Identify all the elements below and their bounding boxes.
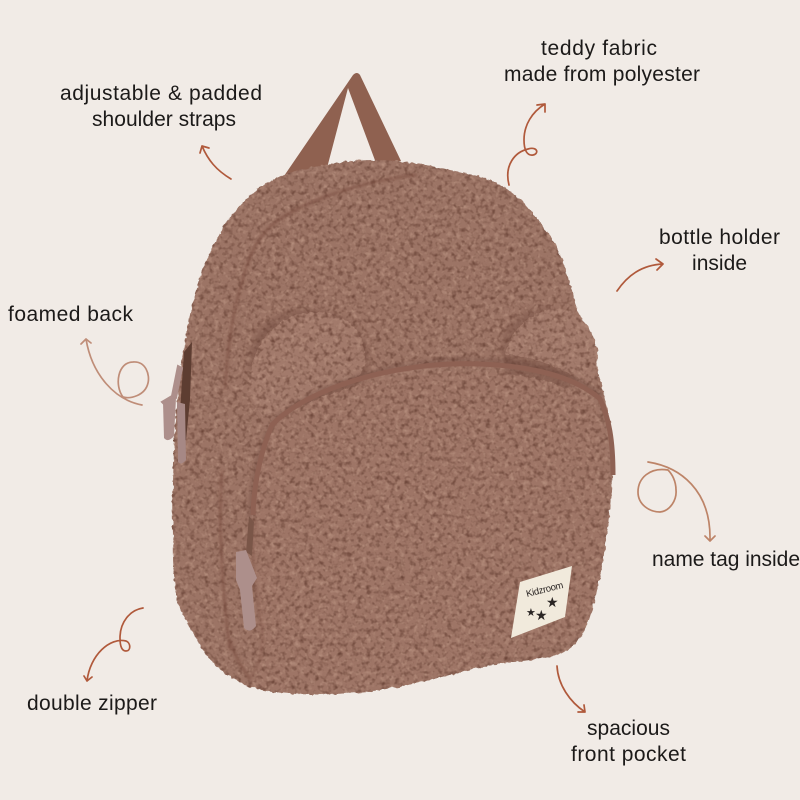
text: spacious front pocket xyxy=(571,717,686,766)
arrow: to name tag xyxy=(638,462,715,541)
right ear xyxy=(505,309,597,386)
callout: foamed back xyxy=(8,303,148,405)
text: name tag inside: name tag inside xyxy=(652,548,800,571)
zipper pull: pocket xyxy=(236,516,257,631)
side gusset seams xyxy=(220,175,417,680)
left ear xyxy=(250,312,365,418)
text: teddy fabric made from polyester: teddy fabric xyxy=(541,37,657,60)
callout: teddy fabric xyxy=(504,37,700,185)
text: adjustable and padded shoulder straps: adjustable & padded xyxy=(60,82,262,105)
shadow behind left ear xyxy=(249,309,369,407)
callout: name tag xyxy=(638,462,800,571)
backpack xyxy=(162,73,613,694)
text: adjustable and padded shoulder straps xyxy=(60,82,262,131)
text: bottle holder inside xyxy=(659,226,780,275)
brand name: Kidzroom xyxy=(525,580,565,600)
zipper pull: left xyxy=(162,366,186,464)
text: teddy fabric made from polyester xyxy=(504,37,700,86)
arrow: to pocket xyxy=(557,666,585,712)
pocket bottom-left crease xyxy=(250,520,263,678)
text: teddy fabric made from polyester: made from polyester xyxy=(504,63,700,86)
arrow: to fabric xyxy=(508,104,545,185)
carry handle xyxy=(284,73,401,176)
callout: shoulder straps xyxy=(60,82,262,179)
three stars xyxy=(526,594,559,623)
text: bottle holder inside: bottle holder xyxy=(659,226,780,249)
text: bottle holder inside: inside xyxy=(692,252,747,275)
front pocket xyxy=(252,372,608,692)
callout: bottle holder xyxy=(617,226,780,291)
arrow: to back xyxy=(81,339,148,405)
bag body xyxy=(172,160,613,694)
three stars: ★ xyxy=(535,607,548,623)
pocket zipper xyxy=(253,364,613,515)
callout: front pocket xyxy=(557,666,686,766)
text: spacious front pocket: front pocket xyxy=(571,743,686,766)
callout: double zipper xyxy=(27,608,157,715)
arrow: to straps xyxy=(200,146,231,179)
three stars: ★ xyxy=(526,607,536,619)
pocket shadow xyxy=(250,360,602,520)
text: double zipper: double zipper xyxy=(27,692,157,715)
three stars: ★ xyxy=(546,594,559,610)
text: foamed back: foamed back xyxy=(8,303,134,326)
side zipper dark gap xyxy=(178,342,192,442)
brand label xyxy=(511,566,572,638)
text: spacious front pocket: spacious xyxy=(587,717,670,740)
shadow behind right ear xyxy=(501,308,585,396)
arrow: to zipper xyxy=(84,608,143,681)
arrow: to bottle holder xyxy=(617,259,663,291)
text: adjustable and padded shoulder straps: shoulder straps xyxy=(92,108,236,131)
